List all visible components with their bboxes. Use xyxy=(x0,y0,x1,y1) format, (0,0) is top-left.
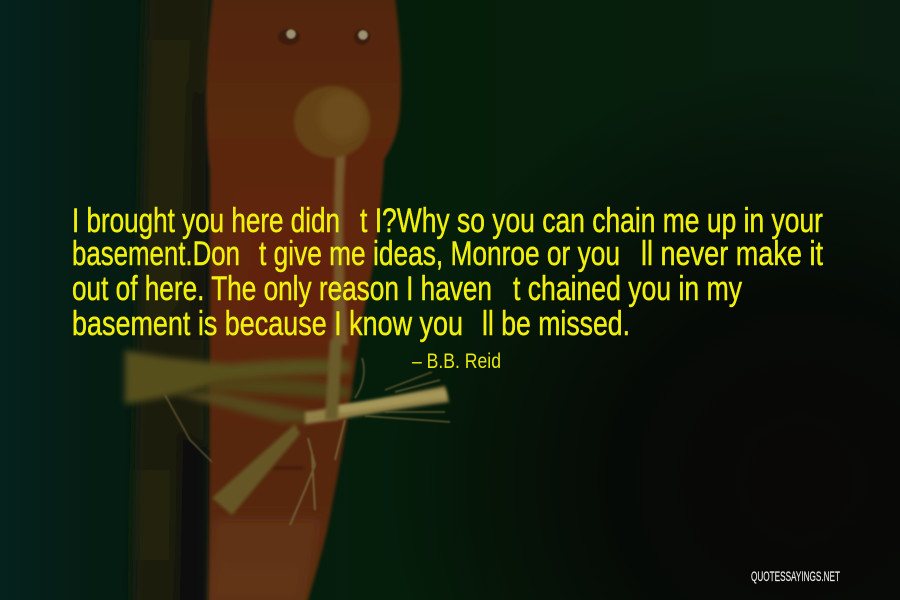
twine: knot tail xyxy=(305,386,449,424)
carrot nose and root xyxy=(294,86,370,345)
tree trunk xyxy=(132,0,214,600)
twine: fine fibres xyxy=(165,358,450,462)
line 2: basement.Don xyxy=(72,235,240,273)
line 2 xyxy=(72,235,823,273)
line 4: ll be missed. xyxy=(482,305,630,343)
carrot eyes xyxy=(278,29,370,45)
twine: hanging straws xyxy=(212,424,300,515)
twine: upper bundle xyxy=(125,350,350,404)
carrot body xyxy=(206,0,401,600)
line 1 xyxy=(72,202,823,240)
watermark: QUOTESSAYINGS.NET xyxy=(751,568,840,584)
author attribution: – B.B. Reid xyxy=(412,350,501,373)
twine: middle strands xyxy=(200,379,350,398)
line 2: ll never make it xyxy=(641,235,823,273)
twine: lower diagonal strand xyxy=(175,392,310,422)
twine knot xyxy=(125,340,450,525)
line 3: t chained you in my xyxy=(513,270,742,308)
twine: vertical strand xyxy=(325,340,342,420)
line 2: t give me ideas, Monroe or you xyxy=(259,235,620,273)
line 4: basement is because I know you xyxy=(72,305,463,343)
quote text xyxy=(72,202,823,343)
line 3: out of here. The only reason I haven xyxy=(72,270,492,308)
line 1: I brought you here didn xyxy=(72,202,340,240)
